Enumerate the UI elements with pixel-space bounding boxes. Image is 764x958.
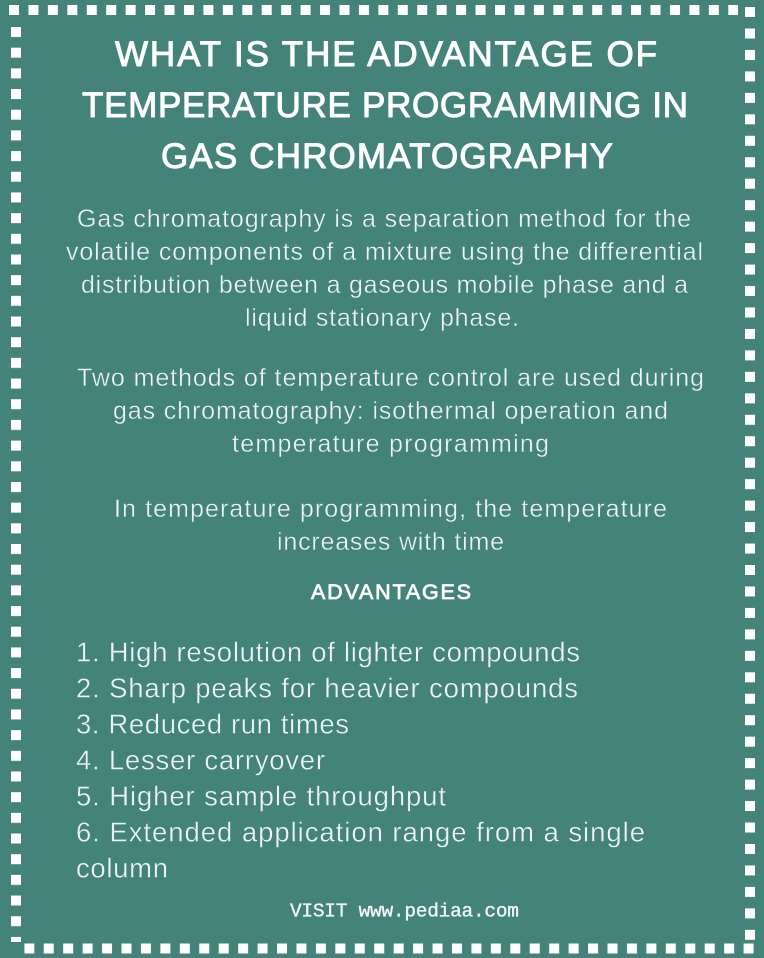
heading: advantages: ADVANTAGES bbox=[311, 580, 471, 604]
text block: definition of gas chromatography: distribution between a gaseous mobile phase and a bbox=[81, 271, 688, 299]
list of advantages: 6. Extended application range from a single bbox=[76, 816, 645, 848]
text block: two methods of temperature control: Two methods of temperature control are used during bbox=[77, 364, 704, 392]
list of advantages: column bbox=[76, 852, 168, 884]
title: TEMPERATURE PROGRAMMING IN bbox=[82, 86, 688, 125]
text block: temperature programming: In temperature programming, the temperature bbox=[114, 495, 667, 523]
list of advantages: 3. Reduced run times bbox=[76, 708, 349, 740]
title: GAS CHROMATOGRAPHY bbox=[161, 137, 613, 176]
footer: source link: VISIT www.pediaa.com bbox=[290, 900, 519, 922]
title bbox=[82, 35, 688, 176]
list of advantages: 1. High resolution of lighter compounds bbox=[76, 636, 580, 668]
text block: definition of gas chromatography bbox=[66, 205, 703, 332]
text block: temperature programming: increases with time bbox=[277, 528, 504, 556]
list of advantages bbox=[76, 636, 645, 884]
text block: definition of gas chromatography: Gas chromatography is a separation method for the bbox=[77, 205, 691, 233]
text block: two methods of temperature control: temperature programming bbox=[232, 430, 549, 458]
list of advantages: 5. Higher sample throughput bbox=[76, 780, 446, 812]
text block: temperature programming bbox=[114, 495, 667, 556]
list of advantages: 2. Sharp peaks for heavier compounds bbox=[76, 672, 578, 704]
text block: two methods of temperature control: gas chromatography: isothermal operation and bbox=[113, 397, 668, 425]
text block: definition of gas chromatography: liquid stationary phase. bbox=[245, 304, 519, 332]
text block: definition of gas chromatography: volatile components of a mixture using the differential bbox=[66, 238, 703, 266]
text block: two methods of temperature control bbox=[77, 364, 704, 458]
title: WHAT IS THE ADVANTAGE OF bbox=[115, 35, 657, 74]
list of advantages: 4. Lesser carryover bbox=[76, 744, 325, 776]
